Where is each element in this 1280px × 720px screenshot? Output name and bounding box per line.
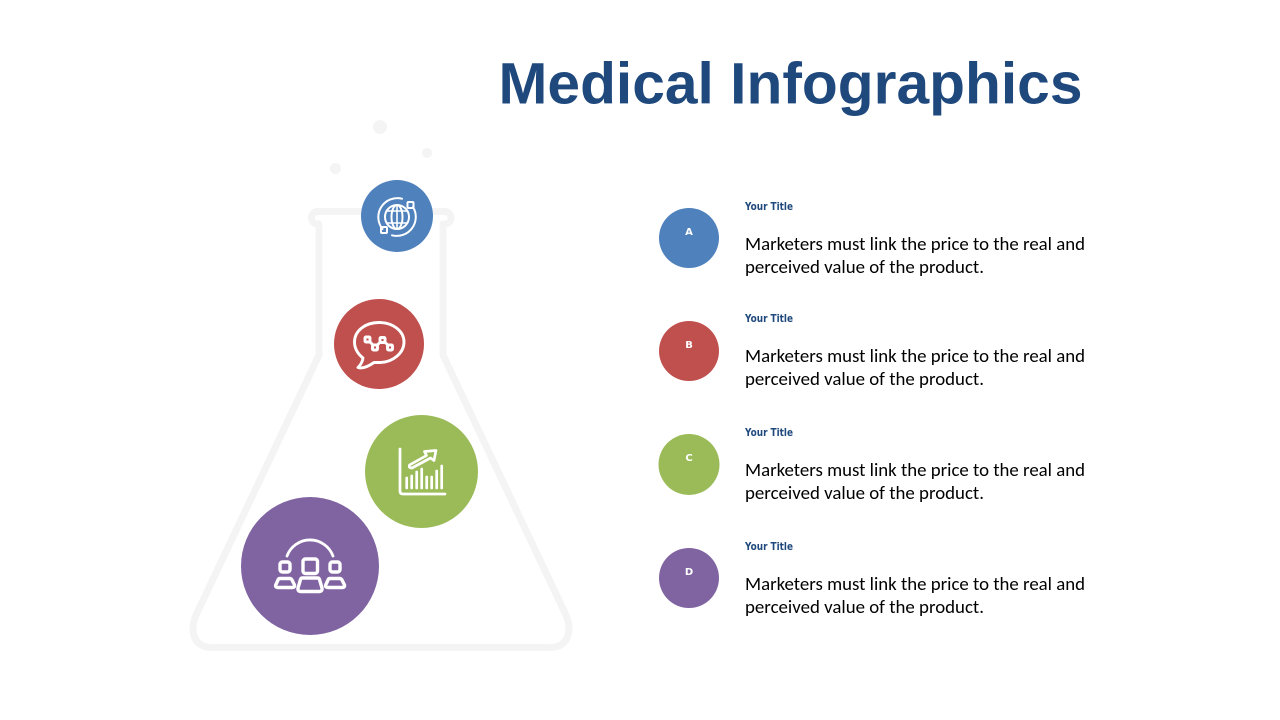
text C: perceived value of the product. — [745, 482, 984, 505]
text A: Marketers must link the price to the real and — [745, 233, 1085, 256]
text D — [745, 573, 1085, 619]
heading A: Your Title — [744, 201, 793, 213]
list item D — [659, 541, 1085, 619]
text B: perceived value of the product. — [745, 368, 984, 391]
flask outline — [193, 212, 569, 648]
badge A: A — [685, 227, 693, 238]
list item B — [659, 313, 1085, 391]
text A — [745, 233, 1085, 279]
text D: perceived value of the product. — [745, 596, 984, 619]
badge D: D — [685, 567, 693, 578]
text B — [745, 345, 1085, 391]
list item A — [659, 201, 1085, 279]
text A: perceived value of the product. — [745, 256, 984, 279]
flask circle: speech icon — [334, 299, 424, 389]
heading C: Your Title — [744, 427, 793, 439]
text C: Marketers must link the price to the real and — [745, 459, 1085, 482]
icon: growth chart — [400, 449, 445, 494]
heading D: Your Title — [744, 541, 793, 553]
heading B: Your Title — [744, 313, 793, 325]
flask illustration — [193, 120, 569, 648]
badge D — [659, 548, 719, 608]
badge A — [659, 208, 719, 268]
list item C — [658, 427, 1085, 505]
icon: globe — [378, 198, 416, 236]
icon: chat bubble — [354, 322, 404, 368]
text B: Marketers must link the price to the real and — [745, 345, 1085, 368]
icon: three people — [276, 540, 345, 592]
bubbles — [330, 120, 432, 174]
badge C: C — [685, 453, 693, 464]
text D: Marketers must link the price to the real and — [745, 573, 1085, 596]
flask circle: chart icon — [365, 415, 478, 528]
title: Medical Infographics — [498, 52, 1082, 116]
badge B: B — [685, 340, 693, 351]
badge C — [658, 434, 720, 495]
flask circle: people icon — [241, 497, 379, 635]
flask circle: globe icon — [361, 180, 433, 252]
text C — [745, 459, 1085, 505]
badge B — [659, 321, 719, 381]
